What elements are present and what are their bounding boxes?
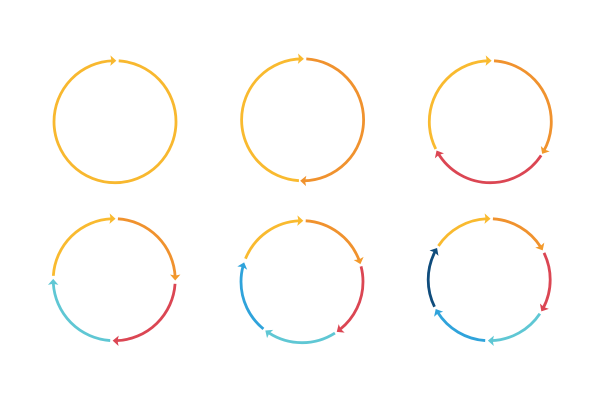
cycle diagram: three steps: [429, 55, 551, 183]
cycle diagram: five steps: [237, 215, 365, 343]
cycle diagram: two steps: [242, 54, 364, 186]
cycle diagram: one step: [54, 55, 176, 183]
cycle diagram: four steps: [48, 213, 180, 346]
cycle diagram: six steps: [428, 213, 550, 346]
